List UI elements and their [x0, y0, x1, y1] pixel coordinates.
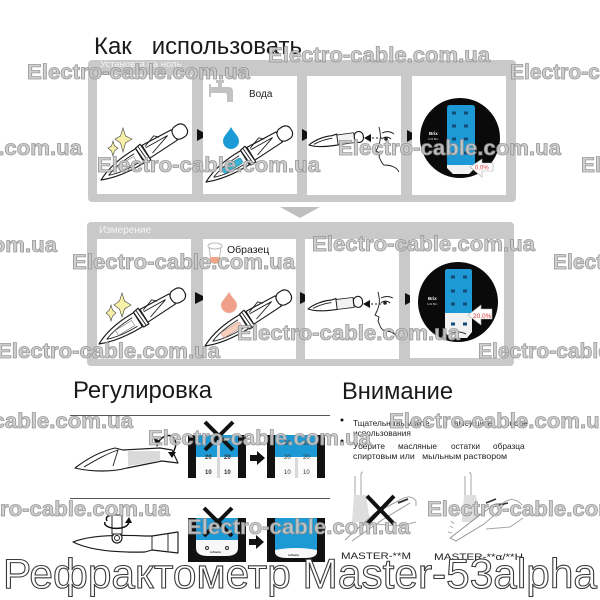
icon: cross: [367, 496, 394, 524]
step 4: scale reads 0.0%: Brix: [429, 131, 438, 136]
watermarks: Electro-cable.com.ua: [0, 340, 220, 363]
illustration: allowed cleaning under tap: [448, 473, 523, 541]
adjustment row 2: calibration: [73, 508, 325, 562]
arrow: [250, 451, 265, 465]
step 4: scale reads 20.0%: Brix: [428, 296, 437, 301]
icon: refractometer with rotation arrow: [75, 435, 178, 471]
watermarks: Electro-cable.com.ua: [237, 322, 460, 345]
label: master alpha H: MASTER-**α/**H: [434, 552, 523, 563]
text block: care instructions: Тщательно: [353, 418, 396, 428]
watermarks: Electro-cable.com.ua: [187, 516, 410, 539]
scale: wrong: 10: [205, 470, 212, 476]
icon: sample drop: [221, 292, 237, 313]
step 4: scale reads 0.0%: 0.0%: [475, 166, 489, 172]
scale: wrong: refracto: [210, 550, 221, 554]
label: master M: MASTER-**M: [341, 551, 411, 562]
scale: correct: 30: [303, 441, 310, 447]
scale: wrong: 20: [205, 455, 212, 461]
step 2: water: [201, 76, 297, 194]
text block: care instructions: после: [505, 418, 528, 428]
arrow: [405, 293, 417, 305]
step 2: sample: [200, 239, 296, 359]
heading: attention: Внимание: [342, 378, 453, 405]
text block: care instructions: образца: [493, 441, 525, 451]
step 1: clean prism: [96, 75, 192, 194]
scale: correct: [267, 435, 325, 478]
arrow: [302, 129, 313, 141]
watermarks: Electro-cable.com.ua: [268, 44, 490, 67]
arrow: [249, 535, 264, 549]
text block: care instructions: [340, 418, 528, 461]
step 4: scale reads 20.0%: 20.0%: [473, 313, 492, 320]
watermarks: Electro-cable.com.ua: [338, 137, 561, 160]
step 3: look through eyepiece: [307, 76, 401, 195]
scale: correct: 10: [284, 470, 291, 476]
text block: care instructions: остатки: [451, 441, 480, 451]
icon: faucet: [209, 80, 233, 102]
panel header: zero setting: Установка на ноль: [100, 59, 182, 70]
icon: cross: [204, 508, 232, 536]
watermarks: Electro-cable.com.ua: [389, 410, 600, 433]
text block: care instructions: высушите: [454, 418, 493, 428]
watermarks: Electro-cable.com.ua: [97, 154, 320, 177]
watermarks: Electro-cable.com.ua: [148, 427, 371, 450]
text block: care instructions: Уберите: [353, 441, 385, 451]
scale: correct: 30: [284, 441, 291, 447]
scale: wrong: 20: [224, 455, 231, 461]
text block: care instructions: использования: [353, 428, 411, 438]
icon: face: [376, 127, 399, 172]
text block: care instructions: спиртовым или мыльным раствором: [353, 451, 507, 461]
step 3: look through eyepiece: [305, 239, 399, 359]
step 4: scale reads 0.0%: [412, 76, 506, 195]
arrow: sight line: [363, 300, 370, 308]
text block: care instructions: и: [443, 418, 448, 428]
step 1: clean prism: [94, 239, 191, 359]
illustration: wrong cleaning under tap: [345, 472, 416, 541]
step 4: scale reads 20.0%: [410, 239, 504, 358]
text block: care instructions: масляные: [398, 441, 437, 451]
scale: correct: [267, 518, 325, 562]
arrow: sight line: [364, 134, 371, 142]
watermarks: Electro-cable.com.ua: [27, 61, 250, 84]
scale: wrong: [188, 435, 246, 478]
icon: water drop: [223, 127, 239, 149]
scale: correct: 20: [303, 455, 310, 461]
icon: face: [375, 292, 398, 338]
step 4: scale reads 0.0%: 0-32 Brix: [428, 137, 439, 141]
panel: measurement: [87, 222, 514, 366]
step 4: scale reads 20.0%: 0-32 Brix: [427, 302, 438, 306]
arrow: [197, 129, 208, 141]
icon: cross: [205, 422, 233, 450]
panel header: measurement: Измерение: [99, 225, 151, 236]
arrow: down to measurement: [280, 207, 320, 218]
scale: correct: 20: [284, 455, 291, 461]
text block: care instructions: вымойте: [396, 418, 430, 428]
label: water: Вода: [249, 89, 273, 100]
icon: sample cup: [208, 243, 222, 264]
scale: correct: refracto: [288, 553, 299, 557]
panel: zero setting: [88, 59, 516, 202]
label: sample: Образец: [227, 244, 269, 256]
arrow: [407, 130, 418, 142]
scale: wrong: [188, 518, 246, 562]
scale: wrong: 10: [224, 470, 231, 476]
arrow: [195, 292, 207, 304]
scale: correct: 10: [303, 470, 310, 476]
arrow: [300, 292, 312, 304]
icon: refractometer with calibration screw: [73, 515, 178, 553]
watermarks: Electro-cable.com.ua: [312, 233, 535, 256]
title: how to use: Как использовать: [94, 33, 302, 60]
adjustment row 1: diopter: [75, 422, 325, 478]
heading: adjustment: Регулировка: [73, 377, 213, 404]
product title caption: Рефрактометр Master-53alpha: [3, 550, 598, 597]
watermarks: Electro-cable.com.ua: [72, 251, 295, 274]
